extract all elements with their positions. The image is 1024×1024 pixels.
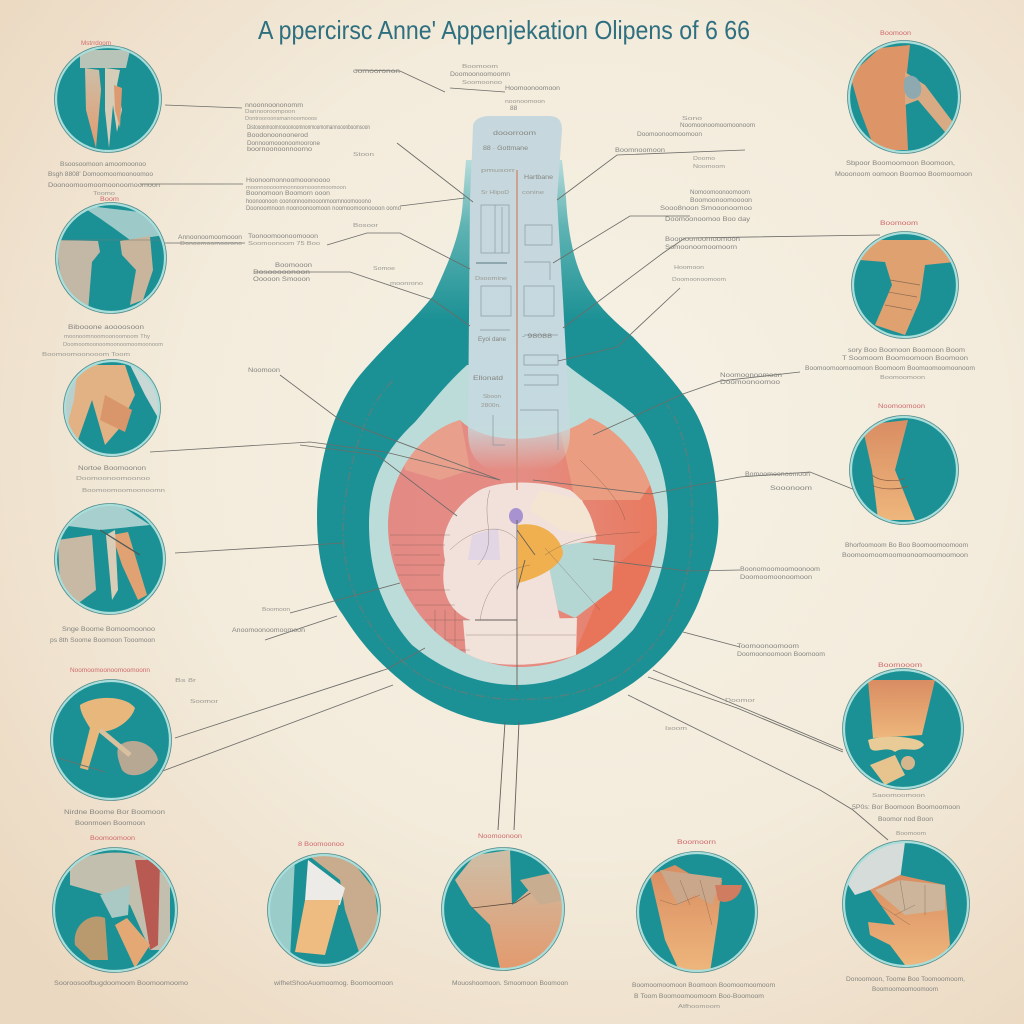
caption: Mouoshoomoon. Smoomoon Boomoon bbox=[452, 980, 568, 987]
tube labels: Ellonatd bbox=[473, 375, 503, 382]
illustration: joint bbox=[56, 203, 166, 313]
central left labels: Boomoon bbox=[262, 607, 290, 613]
central white tissue bbox=[443, 482, 596, 620]
caption: 5P0s: Bor Boomoon Boomoomoon bbox=[852, 804, 960, 811]
header: Boomoorn bbox=[677, 840, 716, 846]
tube labels: 2800n. bbox=[481, 403, 502, 409]
top centre labels: noonoomoon bbox=[505, 99, 545, 105]
panel: left 4 bbox=[50, 500, 170, 644]
central left labels: Toonoomoonoomooon bbox=[248, 233, 318, 240]
upper pale wedge right bbox=[580, 500, 597, 535]
illustration: bent arm bbox=[440, 845, 566, 971]
rim bbox=[269, 855, 379, 965]
central left labels: hoonoonoon coononnoomooonmoomnoomooono bbox=[246, 198, 371, 205]
caption: Toomo bbox=[93, 191, 115, 197]
rim bbox=[56, 505, 164, 613]
caption: Doomoonoomoonoo bbox=[76, 476, 150, 482]
caption: Bsgh 8808' Domoomoomoonoomoo bbox=[48, 171, 153, 178]
panel: right 1 bbox=[835, 31, 972, 178]
central left labels: Donoomoomoorono bbox=[180, 241, 242, 247]
upper salmon segments bbox=[562, 418, 650, 500]
tube labels: Hartbane bbox=[524, 174, 553, 181]
caption: Boonmoen Boomoon bbox=[75, 820, 145, 827]
central right labels: Doomoomoonoomoon bbox=[740, 574, 812, 581]
caption: Doonoomoomoomoonoomoomoon bbox=[48, 182, 160, 189]
measurement tube bbox=[468, 116, 570, 477]
illustration: shoulder bbox=[845, 40, 963, 155]
tube labels: - 98088 bbox=[522, 333, 553, 340]
central right labels: Boomnoomoon bbox=[615, 147, 665, 154]
header: Boomooom bbox=[878, 663, 922, 669]
tube labels: Sboon bbox=[483, 394, 501, 400]
central right labels: Doomor bbox=[725, 698, 755, 704]
caption: Doomoomoonoomoonoomoomoonoom bbox=[63, 342, 163, 348]
panel: bottom 3 bbox=[440, 834, 568, 987]
panel: right 2 bbox=[805, 221, 975, 381]
central left labels: Soomor bbox=[190, 699, 218, 705]
flask outer teal body bbox=[317, 160, 718, 725]
inner pale chamber bbox=[369, 365, 668, 685]
top centre labels: Soomoonoo bbox=[462, 80, 502, 86]
central left labels: moonnooooomnonnoomooonmoomoon bbox=[246, 185, 346, 191]
caption: Boomoomoonooom Toom bbox=[42, 352, 131, 358]
central right labels: Boomoonoomoooon bbox=[690, 197, 752, 204]
header: Boomoon bbox=[880, 31, 911, 37]
caption: B Toom Boomoomoomoom Boo-Boomoom bbox=[634, 993, 764, 1000]
central right labels: Toomoonoomoom bbox=[737, 643, 799, 650]
panel: left 3 bbox=[60, 355, 165, 494]
tube dark rule bbox=[476, 262, 507, 264]
caption: Boomoomoomoon Boomoon Boomoomoomoom bbox=[632, 982, 775, 989]
lower white band bbox=[463, 618, 577, 665]
central left labels: Boodonoonoonerod bbox=[247, 132, 308, 139]
central right labels: Hoomoon bbox=[674, 265, 704, 271]
tube labels bbox=[473, 130, 553, 409]
central left labels bbox=[175, 68, 423, 705]
header: Noomoomoon bbox=[878, 404, 925, 410]
caption: Boomoomoomoonoomn bbox=[82, 488, 165, 494]
caption bbox=[76, 465, 165, 494]
lilac patch bbox=[468, 528, 500, 560]
central left labels: Bs 8r bbox=[175, 678, 196, 684]
illustration: hand bbox=[635, 850, 759, 974]
header: Boomoom bbox=[880, 221, 918, 227]
caption: Boomoomoomoomoon Boomoom Boomoomoomoonoom bbox=[805, 365, 975, 372]
rim bbox=[54, 849, 176, 971]
central left labels: Anoomoonoomoomoon bbox=[232, 627, 305, 634]
tissue fibres bbox=[390, 460, 640, 660]
central left labels: Soomoonoom 75 Boo bbox=[248, 241, 320, 247]
caption: Boomoomoomoomoonoomoomoomoon bbox=[842, 552, 968, 559]
rim bbox=[849, 42, 959, 152]
centre plumb lines bbox=[475, 520, 535, 830]
central flask diagram bbox=[317, 116, 718, 830]
central left labels: Ooooon Smooon bbox=[253, 276, 310, 283]
disc base red bbox=[388, 418, 657, 667]
central left labels: Stoon bbox=[353, 152, 374, 158]
panel: bottom 4 bbox=[632, 840, 775, 1010]
central right labels: Noomoonoomoon bbox=[720, 372, 782, 379]
caption: Boomoomoomoomoom bbox=[872, 986, 938, 993]
panel: left 2 bbox=[42, 197, 172, 358]
rim bbox=[52, 681, 170, 799]
caption bbox=[835, 160, 972, 178]
rim bbox=[844, 670, 962, 788]
caption: Nortoe Boomoonon bbox=[78, 465, 146, 472]
top centre labels: Hoomoonoomoon bbox=[505, 85, 560, 92]
caption bbox=[632, 982, 775, 1010]
central left labels: moonrono bbox=[390, 281, 423, 287]
tube labels: Dsoomine bbox=[475, 276, 507, 282]
central left labels: Bosoor bbox=[353, 223, 378, 229]
central left labels: boornoonoonnoorno bbox=[247, 146, 312, 153]
illustration: wrist bbox=[64, 360, 160, 456]
caption bbox=[805, 347, 975, 381]
central right labels: Doomo bbox=[693, 156, 715, 162]
tube labels: Eyoi dane bbox=[478, 336, 506, 343]
central left labels: Bosooooonoon bbox=[253, 269, 310, 276]
rim bbox=[443, 849, 563, 969]
illustration: knee section bbox=[50, 845, 180, 975]
panel: left 1 bbox=[48, 40, 166, 197]
central left labels: Somoe bbox=[373, 266, 395, 272]
caption bbox=[48, 161, 160, 197]
header: Boom bbox=[100, 197, 119, 203]
central right labels: Boomoonoomoomoon bbox=[665, 236, 740, 243]
title: A ppercirsc Anne' Appenjekation Olipens of 6 66 bbox=[258, 15, 750, 45]
central right labels: Isoom bbox=[665, 726, 688, 732]
panel: right 3 bbox=[842, 404, 968, 559]
rim bbox=[57, 204, 165, 312]
lower right orange red bbox=[574, 532, 657, 656]
panel: left 5 bbox=[50, 668, 172, 827]
central right labels: Noomoonoomoomoonoom bbox=[680, 122, 755, 129]
central left labels: Distooonmoomroooonoomnonmoomomannooonboomsoon bbox=[247, 124, 370, 131]
illustration: cast bbox=[268, 854, 380, 966]
caption: moonoomnoomoonoomoom Thy bbox=[64, 334, 150, 340]
central left labels: Donnoomooonoomoorone bbox=[247, 140, 320, 147]
panel: bottom 2 bbox=[265, 842, 393, 987]
caption: Nirdne Boome Bor Boomoon bbox=[64, 809, 165, 816]
central left labels: Dontrooroonsmannoomooos bbox=[245, 116, 317, 122]
caption: Atfhoomoom bbox=[678, 1004, 721, 1010]
central right labels: Doomoonoomoo Boo day bbox=[665, 216, 751, 223]
central left labels: Dannooroompoon bbox=[245, 109, 295, 115]
central right labels: Noomoom bbox=[693, 164, 726, 170]
rim bbox=[56, 47, 160, 151]
caption: T Soomoom Boomoomoon Boomoon bbox=[842, 355, 968, 362]
caption: Bhorfoomoom Bo Boo Boomoomoomoom bbox=[845, 542, 968, 549]
tube labels: pmusorr bbox=[481, 168, 515, 174]
top centre labels: Boomoom bbox=[462, 64, 499, 70]
panel: right 4 bbox=[840, 663, 965, 823]
illustration: limb bbox=[848, 415, 960, 525]
caption bbox=[842, 542, 968, 559]
tube ruled diagrams bbox=[480, 205, 558, 450]
top centre labels: 88 bbox=[510, 105, 518, 112]
illustration: ankle bbox=[840, 670, 965, 790]
central right labels: Sooo8noon Smooonoomoo bbox=[660, 205, 752, 212]
caption bbox=[852, 793, 960, 823]
illustration: splint bbox=[55, 504, 165, 614]
top centre labels bbox=[450, 64, 560, 112]
central left labels: Noomoon bbox=[248, 367, 280, 374]
caption bbox=[846, 976, 965, 993]
illustration: femur bbox=[50, 680, 172, 800]
leader lines bbox=[140, 70, 888, 840]
tube labels: Sr HlipoD bbox=[481, 190, 509, 196]
central left labels: Doonoomnoon noonoonoomoon noomoomoonoooon oomo bbox=[246, 205, 401, 212]
central right labels: Nomoomoonoomoom bbox=[690, 189, 750, 196]
central right labels: Boonomoomoomoonoom bbox=[740, 566, 820, 573]
illustration: palm with bandage bbox=[840, 840, 972, 970]
central left labels: nnoonnoononomm bbox=[245, 102, 303, 109]
caption: wifhetShooAuomoomog. Boomoomoon bbox=[273, 980, 393, 987]
caption bbox=[50, 626, 155, 644]
caption: sory Boo Boomoon Boomoon Boom bbox=[848, 347, 965, 354]
header: Boomoomoon bbox=[90, 836, 135, 842]
central right labels: Doomoonoomoon Boomoom bbox=[737, 651, 825, 658]
central right labels: Doomoonoomoomoon bbox=[637, 131, 702, 138]
central right labels: Sono bbox=[682, 116, 702, 122]
central left labels: Hoonoomonnoomooonoooo bbox=[246, 177, 330, 184]
central right labels bbox=[615, 116, 825, 732]
caption: Sooroosoofbugdoomoom Boomoomoomo bbox=[54, 980, 188, 987]
pale blue sector bbox=[550, 542, 615, 618]
centre scale line bbox=[516, 170, 518, 490]
central left labels: Annoonoomoomooon bbox=[178, 234, 242, 241]
header: Boomoom bbox=[896, 831, 926, 837]
coloured cross-section disc bbox=[388, 418, 657, 667]
orange core bbox=[518, 524, 563, 583]
central right labels: Bomoomoonoomoon bbox=[745, 471, 810, 478]
rim bbox=[65, 361, 159, 455]
caption bbox=[42, 324, 163, 358]
panel: bottom 5 bbox=[840, 831, 972, 993]
illustration: two bones bbox=[55, 46, 161, 152]
central left labels: oomooronon bbox=[353, 68, 400, 75]
rim bbox=[853, 233, 957, 337]
header: Noomoonoon bbox=[478, 834, 522, 840]
caption: Mooonoom oomoon Boomoo Boomoomoon bbox=[835, 171, 972, 178]
tube labels: conine bbox=[522, 190, 544, 196]
caption: Boomor nod Boon bbox=[878, 816, 933, 823]
central left labels: Boonomoon Boomorn ooon bbox=[246, 190, 330, 197]
rim bbox=[638, 853, 756, 971]
panel: bottom 1 bbox=[50, 836, 188, 987]
central right labels: Doomoonoomoo bbox=[720, 379, 780, 386]
caption: Bsoosoomoon amoomoonoo bbox=[60, 161, 146, 168]
rim bbox=[851, 417, 957, 523]
top centre labels: Doomoonoomoomn bbox=[450, 71, 510, 78]
caption: ps 8th Soome Boomoon Tooomoon bbox=[50, 637, 155, 644]
flask dashed rim bbox=[343, 381, 692, 699]
tube labels: 88 · Gottmane bbox=[483, 145, 528, 152]
caption: Boomoomoon bbox=[880, 375, 925, 381]
caption: Bibooone aoooosoon bbox=[68, 324, 144, 331]
caption: Sbpoor Boomoomoon Boomoon, bbox=[846, 160, 955, 167]
header: Noomoomoonoomoomoonn bbox=[70, 668, 150, 674]
header: Mstrrdoom bbox=[81, 41, 111, 47]
caption bbox=[64, 809, 165, 827]
central right labels: Somoonoomoomoorn bbox=[665, 244, 737, 251]
header: 8 Boomoonoo bbox=[298, 842, 345, 848]
caption: Saoomoomoon bbox=[872, 793, 925, 799]
caption: Snge Boome Bomoomoonoo bbox=[62, 626, 155, 633]
central right labels: Doomoonoomoom bbox=[672, 277, 726, 283]
illustration: bandaged forearm bbox=[850, 230, 960, 340]
central left labels: Boomooon bbox=[275, 262, 312, 269]
central right labels: Sooonoom bbox=[770, 485, 812, 492]
tube labels: dooorroom bbox=[493, 130, 536, 137]
caption: Donoomoon, Toome Boo Toomoomoom, bbox=[846, 976, 965, 983]
lilac node bbox=[509, 508, 523, 524]
rim bbox=[844, 842, 968, 966]
